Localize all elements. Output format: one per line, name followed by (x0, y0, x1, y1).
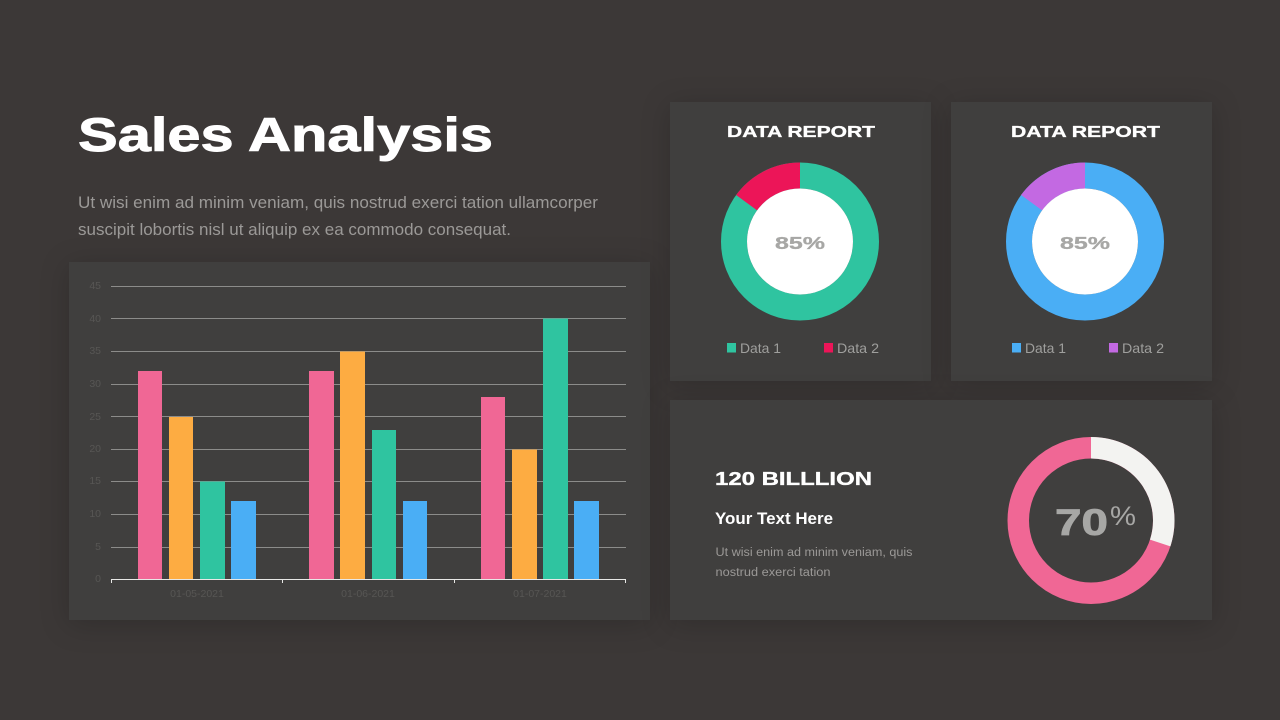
y axis labels: 25 (89, 411, 101, 423)
description (716, 547, 913, 579)
donut chart: 70%: % (1110, 501, 1136, 531)
subheading: Your Text Here (715, 510, 833, 528)
description: nostrud exerci tation (716, 567, 830, 579)
bars: 01-05-2021 (138, 371, 256, 580)
intro text block (78, 194, 599, 239)
legend: Data 1 (1025, 340, 1066, 356)
donut chart: 85%: 85% (1060, 233, 1111, 253)
panel: data report blue (951, 102, 1212, 381)
donut chart: 70% (1018, 448, 1164, 593)
legend (1012, 340, 1164, 356)
legend (727, 340, 879, 356)
bars: 01-07-2021 (481, 318, 599, 580)
y axis labels: 35 (89, 345, 101, 357)
donut chart: 85% (734, 176, 866, 308)
y axis labels: 15 (89, 475, 101, 487)
x axis labels (170, 588, 567, 600)
x axis labels: 01-07-2021 (513, 588, 567, 600)
title: Sales Analysis (78, 108, 493, 161)
panel: bar chart (69, 262, 650, 620)
y axis labels: 30 (89, 378, 101, 390)
bars: 01-06-2021 (309, 352, 427, 580)
y axis labels: 45 (89, 280, 101, 292)
y axis labels: 10 (89, 508, 101, 520)
y axis labels: 0 (95, 573, 101, 585)
heading: DATA REPORT (727, 124, 876, 141)
y axis labels: 5 (95, 541, 101, 553)
x axis labels: 01-06-2021 (341, 588, 395, 600)
intro text block: suscipit lobortis nisl ut aliquip ex ea commodo consequat. (78, 221, 511, 239)
y axis labels: 20 (89, 443, 101, 455)
heading: DATA REPORT (1011, 124, 1161, 141)
stat heading: 120 BILLLION (715, 468, 872, 489)
donut chart: 85% (1019, 176, 1151, 308)
donut chart: 70%: 70 (1055, 502, 1108, 543)
legend: Data 2 (1122, 340, 1164, 356)
intro text block: Ut wisi enim ad minim veniam, quis nostrud exerci tation ullamcorper (78, 194, 599, 212)
panel: 120 billion (670, 400, 1212, 620)
y axis labels: 40 (89, 313, 101, 325)
panel: data report green (670, 102, 931, 381)
legend: Data 1 (740, 340, 781, 356)
legend: Data 2 (837, 340, 879, 356)
x axis labels: 01-05-2021 (170, 588, 224, 600)
y axis labels (89, 280, 101, 585)
description: Ut wisi enim ad minim veniam, quis (716, 547, 913, 559)
donut chart: 85%: 85% (775, 233, 826, 253)
